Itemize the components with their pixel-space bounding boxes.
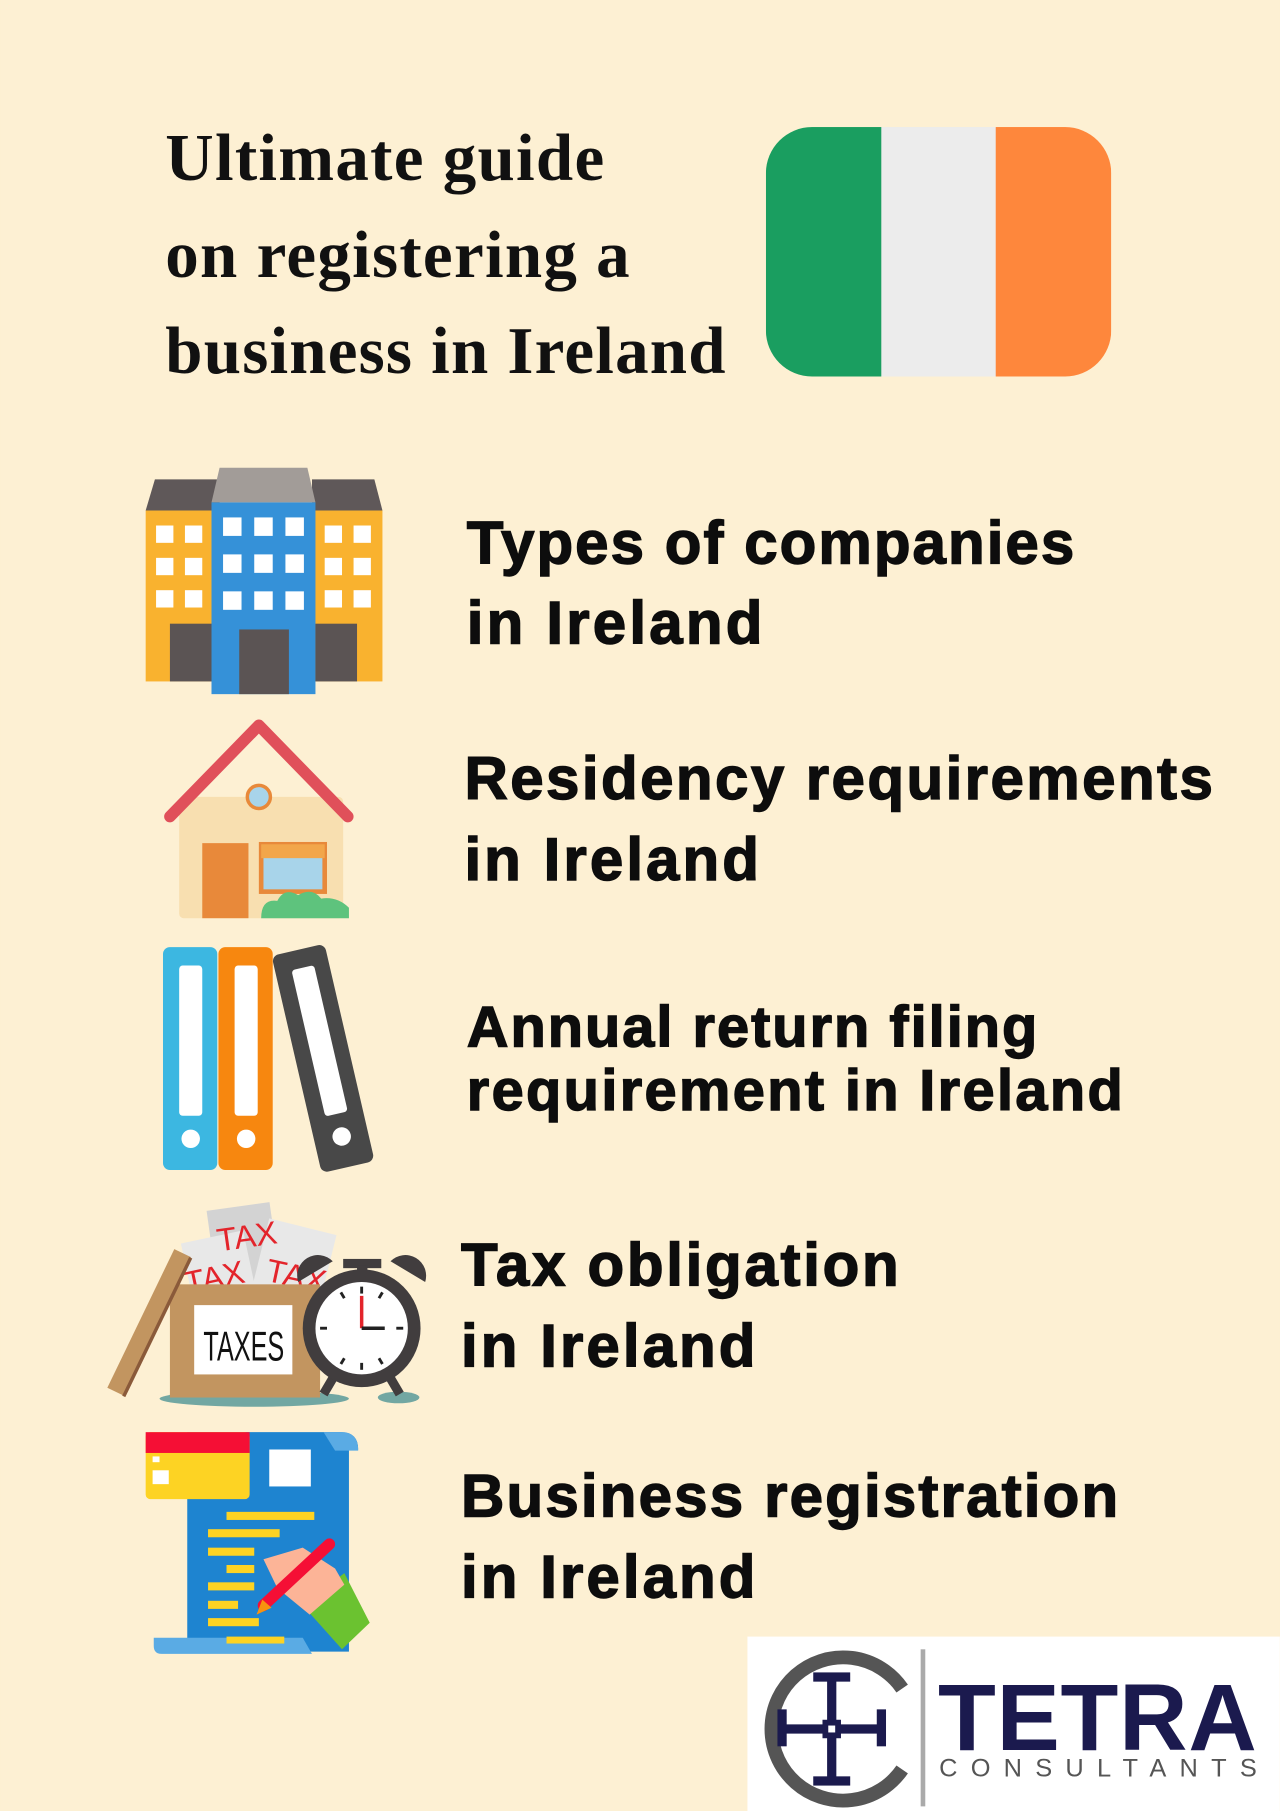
heading: annual return filing: Annual return filing — [467, 995, 1037, 1059]
icon: house — [170, 725, 349, 918]
title: business in Ireland — [165, 314, 725, 388]
icon: registration document — [146, 1432, 370, 1654]
heading: types of companies: in Ireland — [467, 589, 762, 656]
title: on registering a — [165, 218, 630, 292]
heading: types of companies — [467, 510, 1074, 656]
heading: annual return filing — [467, 995, 1123, 1123]
heading: business registration: in Ireland — [461, 1543, 755, 1610]
heading: tax obligation — [461, 1231, 899, 1379]
logo: Tetra Consultants: TETRA — [938, 1665, 1257, 1771]
title: Ultimate guide — [165, 121, 604, 195]
icon: taxes box and clock: TAX — [263, 1252, 330, 1300]
heading: residency requirements — [464, 745, 1213, 893]
heading: residency requirements: Residency requirements — [464, 745, 1213, 812]
icon: taxes box and clock — [116, 1202, 426, 1407]
icon: taxes box and clock: TAX — [181, 1254, 248, 1302]
heading: business registration — [461, 1462, 1118, 1610]
title — [165, 121, 725, 388]
logo: Tetra Consultants — [747, 1637, 1280, 1811]
heading: tax obligation: in Ireland — [461, 1312, 755, 1379]
heading: types of companies: Types of companies — [467, 510, 1074, 577]
icon: taxes box and clock: TAXES — [203, 1323, 284, 1370]
heading: residency requirements: in Ireland — [464, 826, 759, 893]
heading: tax obligation: Tax obligation — [461, 1231, 899, 1298]
icon: taxes box and clock: TAX — [215, 1214, 279, 1258]
icon: buildings — [146, 468, 382, 694]
icon: Irish flag — [766, 127, 1111, 377]
logo: Tetra Consultants: CONSULTANTS — [939, 1754, 1257, 1782]
heading: business registration: Business registration — [461, 1462, 1118, 1529]
heading: annual return filing: requirement in Ireland — [467, 1059, 1123, 1123]
icon: binders — [163, 944, 375, 1173]
